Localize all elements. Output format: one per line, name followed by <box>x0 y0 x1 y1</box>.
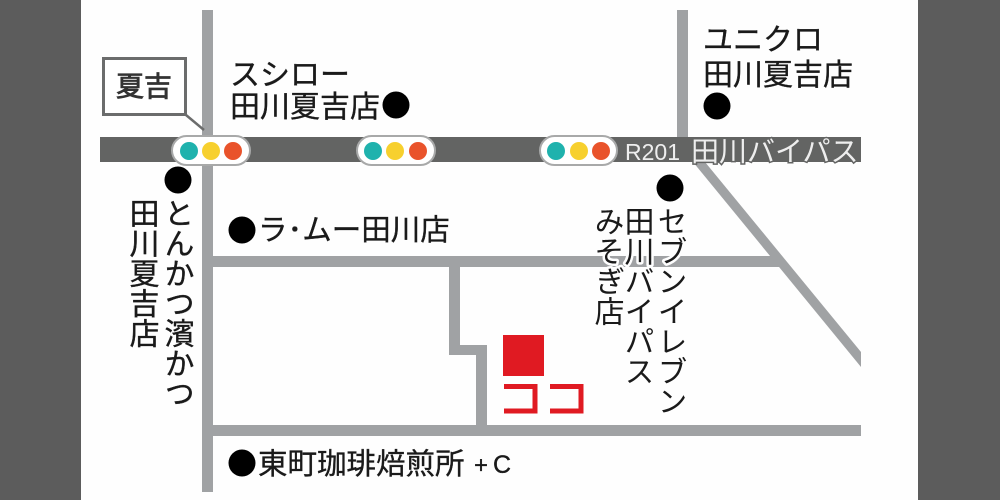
place callout: 夏吉: 夏吉 <box>116 71 172 102</box>
shop: セブンイレブン: みそぎ店 <box>590 206 624 326</box>
shop: スシロー: 田川夏吉店 <box>230 91 380 124</box>
shop: とんかつ濱かつ: とんかつ濱かつ <box>160 198 194 408</box>
road label: 田川バイパス <box>691 136 858 167</box>
destination label: ココ <box>504 386 581 411</box>
shop: スシロー: スシロー <box>230 59 350 92</box>
shop: とんかつ濱かつ: 田川夏吉店 <box>124 198 160 348</box>
shop: スシロー <box>230 59 410 124</box>
road network <box>202 10 861 492</box>
traffic signal 3 <box>540 136 617 165</box>
shop: ユニクロ <box>703 24 853 120</box>
shop: セブンイレブン <box>590 174 686 416</box>
traffic signal 2 <box>357 136 435 165</box>
shop: セブンイレブン: セブンイレブン <box>652 206 686 416</box>
traffic signal 1 <box>172 136 250 165</box>
shop: 東町珈琲焙煎所: + <box>474 452 488 479</box>
shop: とんかつ濱かつ <box>124 166 194 408</box>
place callout: 夏吉 <box>104 58 204 130</box>
shop: セブンイレブン: 田川バイパス <box>620 206 654 386</box>
shop: ユニクロ: 田川夏吉店 <box>703 59 853 92</box>
road label: R201 <box>625 139 680 165</box>
destination marker <box>503 335 544 376</box>
shop: ラ・ムー: ラ･ムー田川店 <box>258 214 450 247</box>
shop: ユニクロ: ユニクロ <box>703 24 823 57</box>
shop: 東町珈琲焙煎所: C <box>493 451 511 479</box>
shop: 東町珈琲焙煎所: 東町珈琲焙煎所 <box>258 448 465 481</box>
main road R201 <box>100 137 861 162</box>
